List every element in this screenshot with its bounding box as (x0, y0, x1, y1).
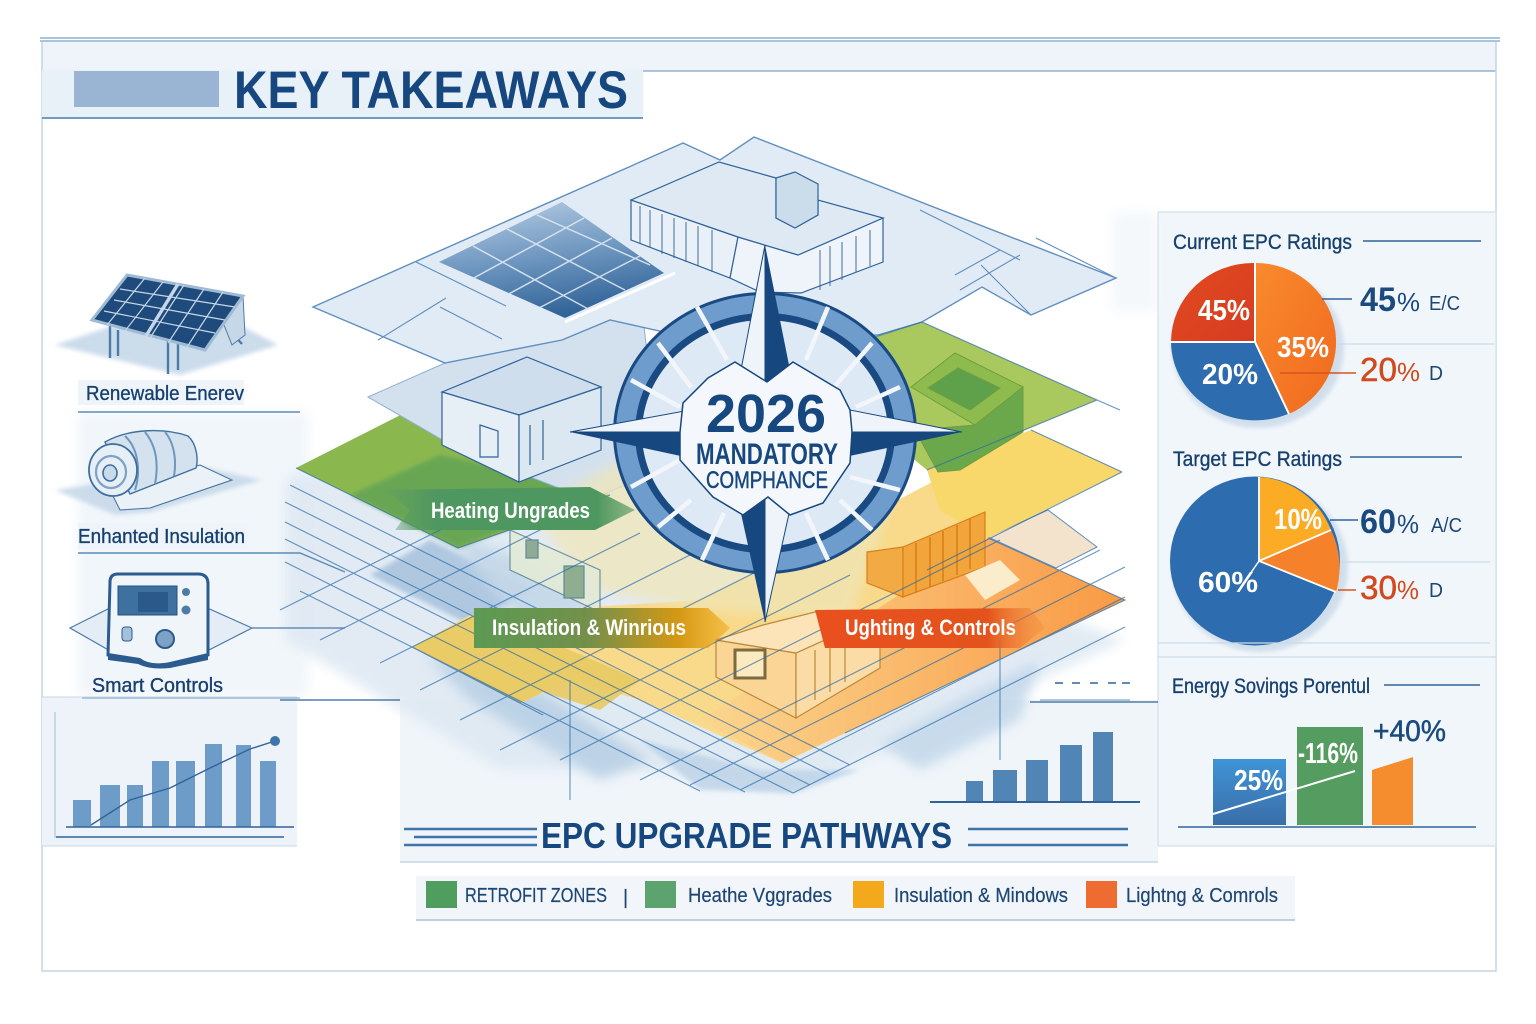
label: Enhanted Insulation (78, 526, 245, 548)
pie chart: current (1171, 263, 1344, 428)
callout: 30 percent D: 30 (1360, 569, 1397, 606)
left column item: enhanced insulation (55, 431, 345, 572)
soft background panels (42, 212, 1496, 862)
layer: left lower yellow (412, 612, 640, 710)
badge text: MANDATORY (696, 438, 838, 471)
top sheet details (378, 210, 1116, 340)
callout: 60 percent A/C: A/C (1431, 515, 1462, 537)
legend: insulation and windows (853, 881, 1068, 908)
title accent block (74, 71, 219, 107)
pie chart: target: 60% (1198, 567, 1258, 599)
layer: green zone left (296, 395, 610, 548)
badge text: 2026 (706, 384, 826, 444)
left column item: renewable energy (55, 275, 300, 412)
layer: pale peach cell (988, 510, 1097, 568)
pie chart: current: 45% (1198, 295, 1250, 327)
bar chart: savings: -116% (1298, 738, 1358, 770)
legend: heating upgrades (645, 881, 832, 908)
legend: lighting and controls: Lightng & Comrols (1126, 885, 1278, 907)
layer: centre tint under compass (530, 450, 900, 620)
section heading: EPC upgrade pathways (404, 815, 1128, 856)
heading: Energy Sovings Porentul (1172, 675, 1370, 698)
bar chart: savings (1178, 715, 1476, 827)
layer: mid blue sheet (368, 290, 660, 500)
legend (416, 876, 1295, 920)
icon: insulation roll (55, 431, 262, 515)
label: Renewable Enerev (86, 383, 244, 405)
pie chart: current: 35% (1277, 332, 1329, 364)
legend: retrofit zones (426, 881, 628, 909)
callout: 60 percent A/C (1330, 503, 1462, 541)
icon: solar panel (55, 275, 278, 375)
legend: retrofit zones: | (623, 887, 628, 909)
legend: retrofit zones: RETROFIT ZONES (465, 885, 607, 907)
label: lighting and controls: Ughting & Controls (845, 615, 1016, 640)
callout: 30 percent D: D (1429, 580, 1443, 602)
label: heating upgrades: Heating Ungrades (431, 498, 590, 523)
pie chart: current: 20% (1202, 359, 1258, 391)
heading: Target EPC Ratings (1173, 448, 1342, 471)
callout: 45 percent E/C: 45 (1360, 281, 1396, 319)
building: top (631, 162, 883, 293)
callout: 45 percent E/C: % (1397, 287, 1420, 317)
label: insulation and windows (474, 608, 730, 648)
section heading: EPC upgrade pathways: EPC UPGRADE PATHWAYS (541, 815, 952, 856)
label: Smart Controls (92, 675, 223, 697)
layer: yellow zone accent (927, 430, 1122, 538)
left column item: smart controls (70, 574, 345, 698)
compass star (570, 245, 962, 622)
compass badge (570, 245, 962, 622)
panel: target EPC ratings (1158, 448, 1496, 657)
badge text (696, 384, 838, 494)
grid lines (280, 322, 1130, 800)
building: left (442, 357, 601, 482)
badge text: COMPHANCE (706, 467, 828, 494)
callout: 20 percent D: % (1397, 357, 1420, 387)
bar chart: savings: 25% (1234, 765, 1283, 797)
legend: insulation and windows: Insulation & Mindows (894, 885, 1068, 907)
callout: 20 percent D (1280, 351, 1443, 388)
title: KEY TAKEAWAYS (234, 61, 628, 120)
layer: green zone right (875, 322, 1097, 470)
pie chart: target (1170, 476, 1348, 652)
building: lower centre (716, 612, 880, 718)
label: insulation and windows: Insulation & Winrious (492, 615, 686, 640)
callout: 45 percent E/C: E/C (1429, 293, 1460, 315)
compass ring (613, 292, 917, 574)
callout: 60 percent A/C: % (1397, 509, 1419, 539)
callout: 30 percent D (1338, 569, 1443, 606)
pie chart: target: 10% (1274, 504, 1322, 536)
legend: heating upgrades: Heathe Vggrades (688, 885, 832, 907)
callout: 45 percent E/C (1322, 281, 1460, 319)
building: green block (911, 353, 1023, 472)
compass centre shield (680, 362, 852, 515)
building: lower left (510, 530, 600, 612)
bar chart: left bottom (42, 697, 297, 846)
label: lighting and controls (815, 608, 1045, 648)
bar chart: map lower right (930, 732, 1140, 802)
panel: energy savings potential (1172, 675, 1480, 827)
callout: 30 percent D: % (1397, 575, 1419, 605)
callout: 60 percent A/C: 60 (1360, 503, 1396, 541)
layer: top blue sheet (313, 137, 1116, 363)
bar chart: savings: +40% (1373, 715, 1446, 748)
layer: orange zone (700, 538, 1125, 763)
heading: Current EPC Ratings (1173, 231, 1352, 254)
layer: base blue wash (285, 395, 1125, 793)
connector dashes (280, 683, 1158, 702)
icon: smart controller (70, 574, 345, 668)
callout: 20 percent D: D (1429, 363, 1443, 385)
callout: 20 percent D: 20 (1360, 351, 1397, 388)
panel: current EPC ratings (1171, 231, 1495, 428)
isometric map (280, 137, 1130, 800)
legend: lighting and controls (1086, 881, 1278, 908)
solar array on roof (439, 202, 675, 322)
label: heating upgrades (385, 487, 635, 530)
building: orange block (867, 512, 1020, 600)
layer: retrofit yellow (412, 430, 1125, 763)
header band (42, 61, 643, 120)
